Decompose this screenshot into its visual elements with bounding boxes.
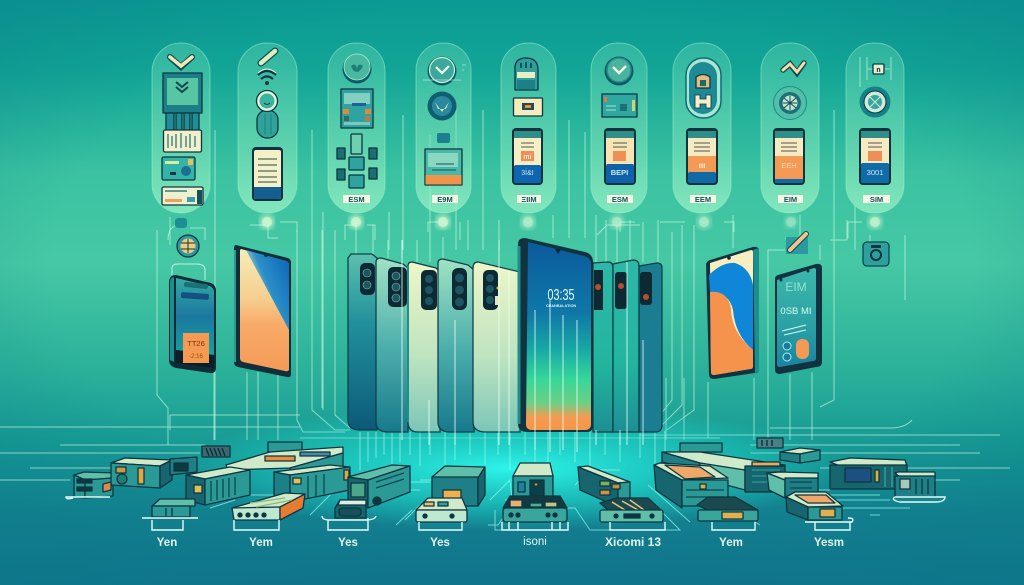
panel: column 1 [152,43,210,213]
phone: main center [518,238,593,432]
icon: check badge [423,56,466,86]
module: box a [74,472,115,498]
small tag [437,133,450,143]
panel: column 9 [846,43,904,213]
node diagram [337,134,377,188]
lines over phones [402,240,643,452]
small card [162,187,203,205]
module: vent [202,446,230,457]
label [778,195,803,204]
module: long right bank [662,443,785,492]
panel: column 8 [761,43,819,213]
icon: chip badge [774,86,806,120]
label: E9M [437,195,453,204]
label [343,195,370,204]
icon: sim bell [515,58,538,90]
server labels: isoni [523,536,547,548]
panel: column 6 [591,43,647,213]
floor circuit traces [206,432,910,530]
rear phone 1 [348,254,377,430]
module: box l [432,466,485,506]
phone: orange blue wallpaper [234,245,291,377]
sim card chip [163,73,202,152]
icon: person [256,90,278,138]
time: 03:35 [548,287,575,304]
phone: 3001 [867,168,883,177]
card panel [425,149,462,185]
phone: blue orange wallpaper [706,247,759,379]
module: box z [895,472,935,497]
module: long bank [226,447,343,492]
server labels: Yes [430,537,450,549]
icon: tick [783,63,804,73]
server labels [157,535,844,549]
module: top block [268,442,302,452]
label: EIM [784,195,797,204]
module: box s [697,497,758,521]
phone [686,128,718,185]
server labels: Yesm [814,537,844,549]
rear phone row right [593,260,662,432]
phone: sim screen: 0SB MI [780,306,812,317]
server labels: Xicomi 13 [605,535,661,549]
icon: chevron [170,57,192,67]
phone: 3İ&I [521,168,534,177]
panel: column 3 [328,43,385,213]
rear phone 5 [473,262,520,432]
phone: document [252,147,283,201]
label: EEM [695,195,711,204]
left server cluster [74,442,485,522]
center and right server cluster [503,438,935,522]
phone [604,128,636,185]
rear phone 4 [438,259,474,432]
icon: M badge [428,92,456,120]
phone: sim screen [775,264,822,374]
label [863,195,890,204]
icon: check badge [604,56,634,86]
module trays and stands [66,497,945,530]
module: box m [416,498,467,522]
module: box h [274,465,350,502]
phone: sim card left: -2:16 [189,354,203,360]
label [690,195,716,204]
phone [859,128,891,185]
server labels: Yes [338,537,358,549]
caption: CRANBALATION [546,304,576,308]
module: isoni top [513,463,553,500]
icon: right connector chip [863,242,889,266]
phone: BEPI [611,168,628,177]
phone: sim card left: TT26 [187,339,205,348]
label [432,195,458,204]
label: ΞIIM [521,195,537,204]
phone: sim card left [169,275,216,373]
phone: sim screen: EIM [785,280,807,294]
module: small a [152,499,195,517]
module: box p [578,466,630,507]
phone: EEH [781,161,797,170]
label: ESM [612,195,628,204]
phone [512,128,543,185]
panel: column 2 [238,43,297,213]
phone: mi [523,154,532,161]
circuit card [602,94,637,117]
panel: column 7 [673,43,731,213]
icon: leaf badge [342,54,372,84]
small card [162,157,195,180]
phone [773,128,805,185]
rear phone 6 [593,262,613,432]
icon: small square: n [876,67,881,74]
module: box q [600,498,663,522]
module: box j [348,465,410,508]
glowing connector nodes [175,215,882,229]
label [517,195,541,204]
small card [514,98,542,116]
rear phone 7 [613,260,639,432]
module: isoni base [503,496,567,522]
module: box u [767,472,818,498]
phone: IIII [699,164,706,170]
label: ESM [348,195,365,204]
module: box e [186,467,250,505]
module: box v [786,492,843,520]
server labels: Yen [157,537,177,549]
label: SIM [870,195,883,204]
module: box b [111,458,172,488]
rear phone 8 [639,263,662,432]
icon: sim badge left [172,235,205,280]
panel: column 5 [501,43,556,213]
icon: round badge [860,86,890,118]
card panel [341,89,373,128]
module: box r [654,463,728,508]
rear phone 3 [408,262,440,432]
floor glow [172,406,852,530]
module: top chip [757,438,783,448]
server labels: Yem [719,537,743,549]
label [607,195,633,204]
module: box c [170,457,197,475]
panel: column 4 [416,43,471,213]
server labels: Yem [249,537,273,549]
module: box x [780,448,820,463]
icon: pencil badge [786,234,808,254]
rear phone row left [348,254,520,432]
module: box k [335,500,366,518]
module: box y [830,458,907,489]
background circuit lines [0,110,1010,480]
module: orange switch [232,493,305,520]
icon: slash and wifi [258,51,276,85]
icon: small square [860,57,891,87]
rear phone 2 [376,258,408,432]
icon: sim pill [686,58,721,118]
